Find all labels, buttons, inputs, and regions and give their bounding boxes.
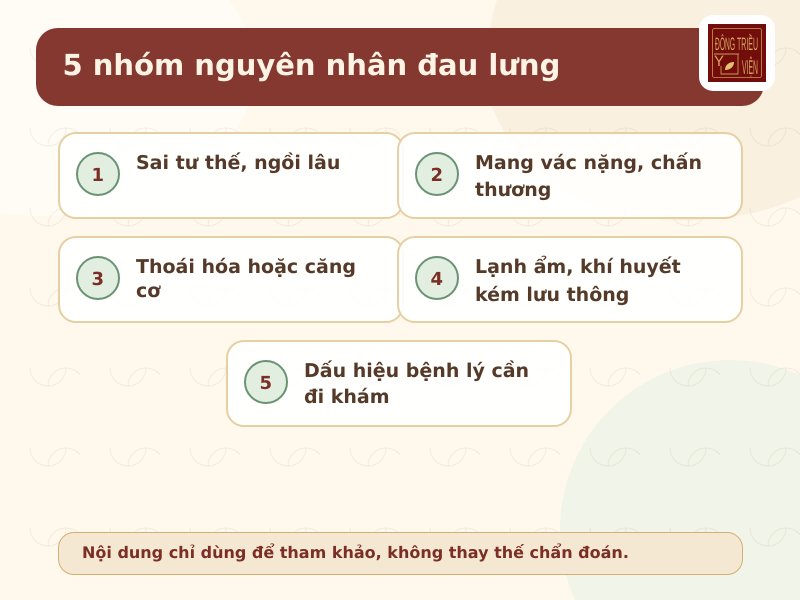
- card 1: [58, 132, 404, 218]
- text 3: [136, 256, 356, 302]
- text 3: Thoái hóa hoặc căng: [136, 256, 356, 278]
- card 3: [58, 236, 404, 322]
- text 2: thương: [475, 178, 551, 200]
- card 2: [397, 132, 742, 218]
- disclaimer: Nội dung chỉ dùng để tham khảo, không thay thế chẩn đoán.: [82, 543, 629, 562]
- text 5: đi khám: [304, 386, 390, 408]
- text 5: [304, 360, 529, 408]
- logo: [699, 15, 775, 91]
- title bar: [36, 28, 764, 106]
- number 1: 1: [92, 165, 104, 186]
- text 4: kém lưu thông: [475, 284, 629, 306]
- number 1: [76, 152, 120, 196]
- text 2: [475, 152, 702, 200]
- text 4: Lạnh ẩm, khí huyết: [475, 256, 681, 278]
- text 1: Sai tư thế, ngồi lâu: [136, 152, 340, 174]
- disclaimer: [58, 532, 743, 575]
- logo: Y: [714, 53, 724, 70]
- text 3: cơ: [136, 280, 160, 302]
- title: 5 nhóm nguyên nhân đau lưng: [62, 48, 560, 82]
- card 5: [226, 340, 572, 426]
- number 2: [415, 152, 459, 196]
- number 5: [244, 360, 288, 404]
- number 4: [415, 256, 459, 300]
- number 3: 3: [92, 269, 104, 290]
- text 5: Dấu hiệu bệnh lý cần: [304, 360, 529, 382]
- number 3: [76, 256, 120, 300]
- number 4: 4: [431, 269, 443, 290]
- card 4: [397, 236, 742, 322]
- number 2: 2: [431, 165, 443, 186]
- number 5: 5: [260, 373, 272, 394]
- text 2: Mang vác nặng, chấn: [475, 152, 702, 174]
- text 4: [475, 256, 681, 306]
